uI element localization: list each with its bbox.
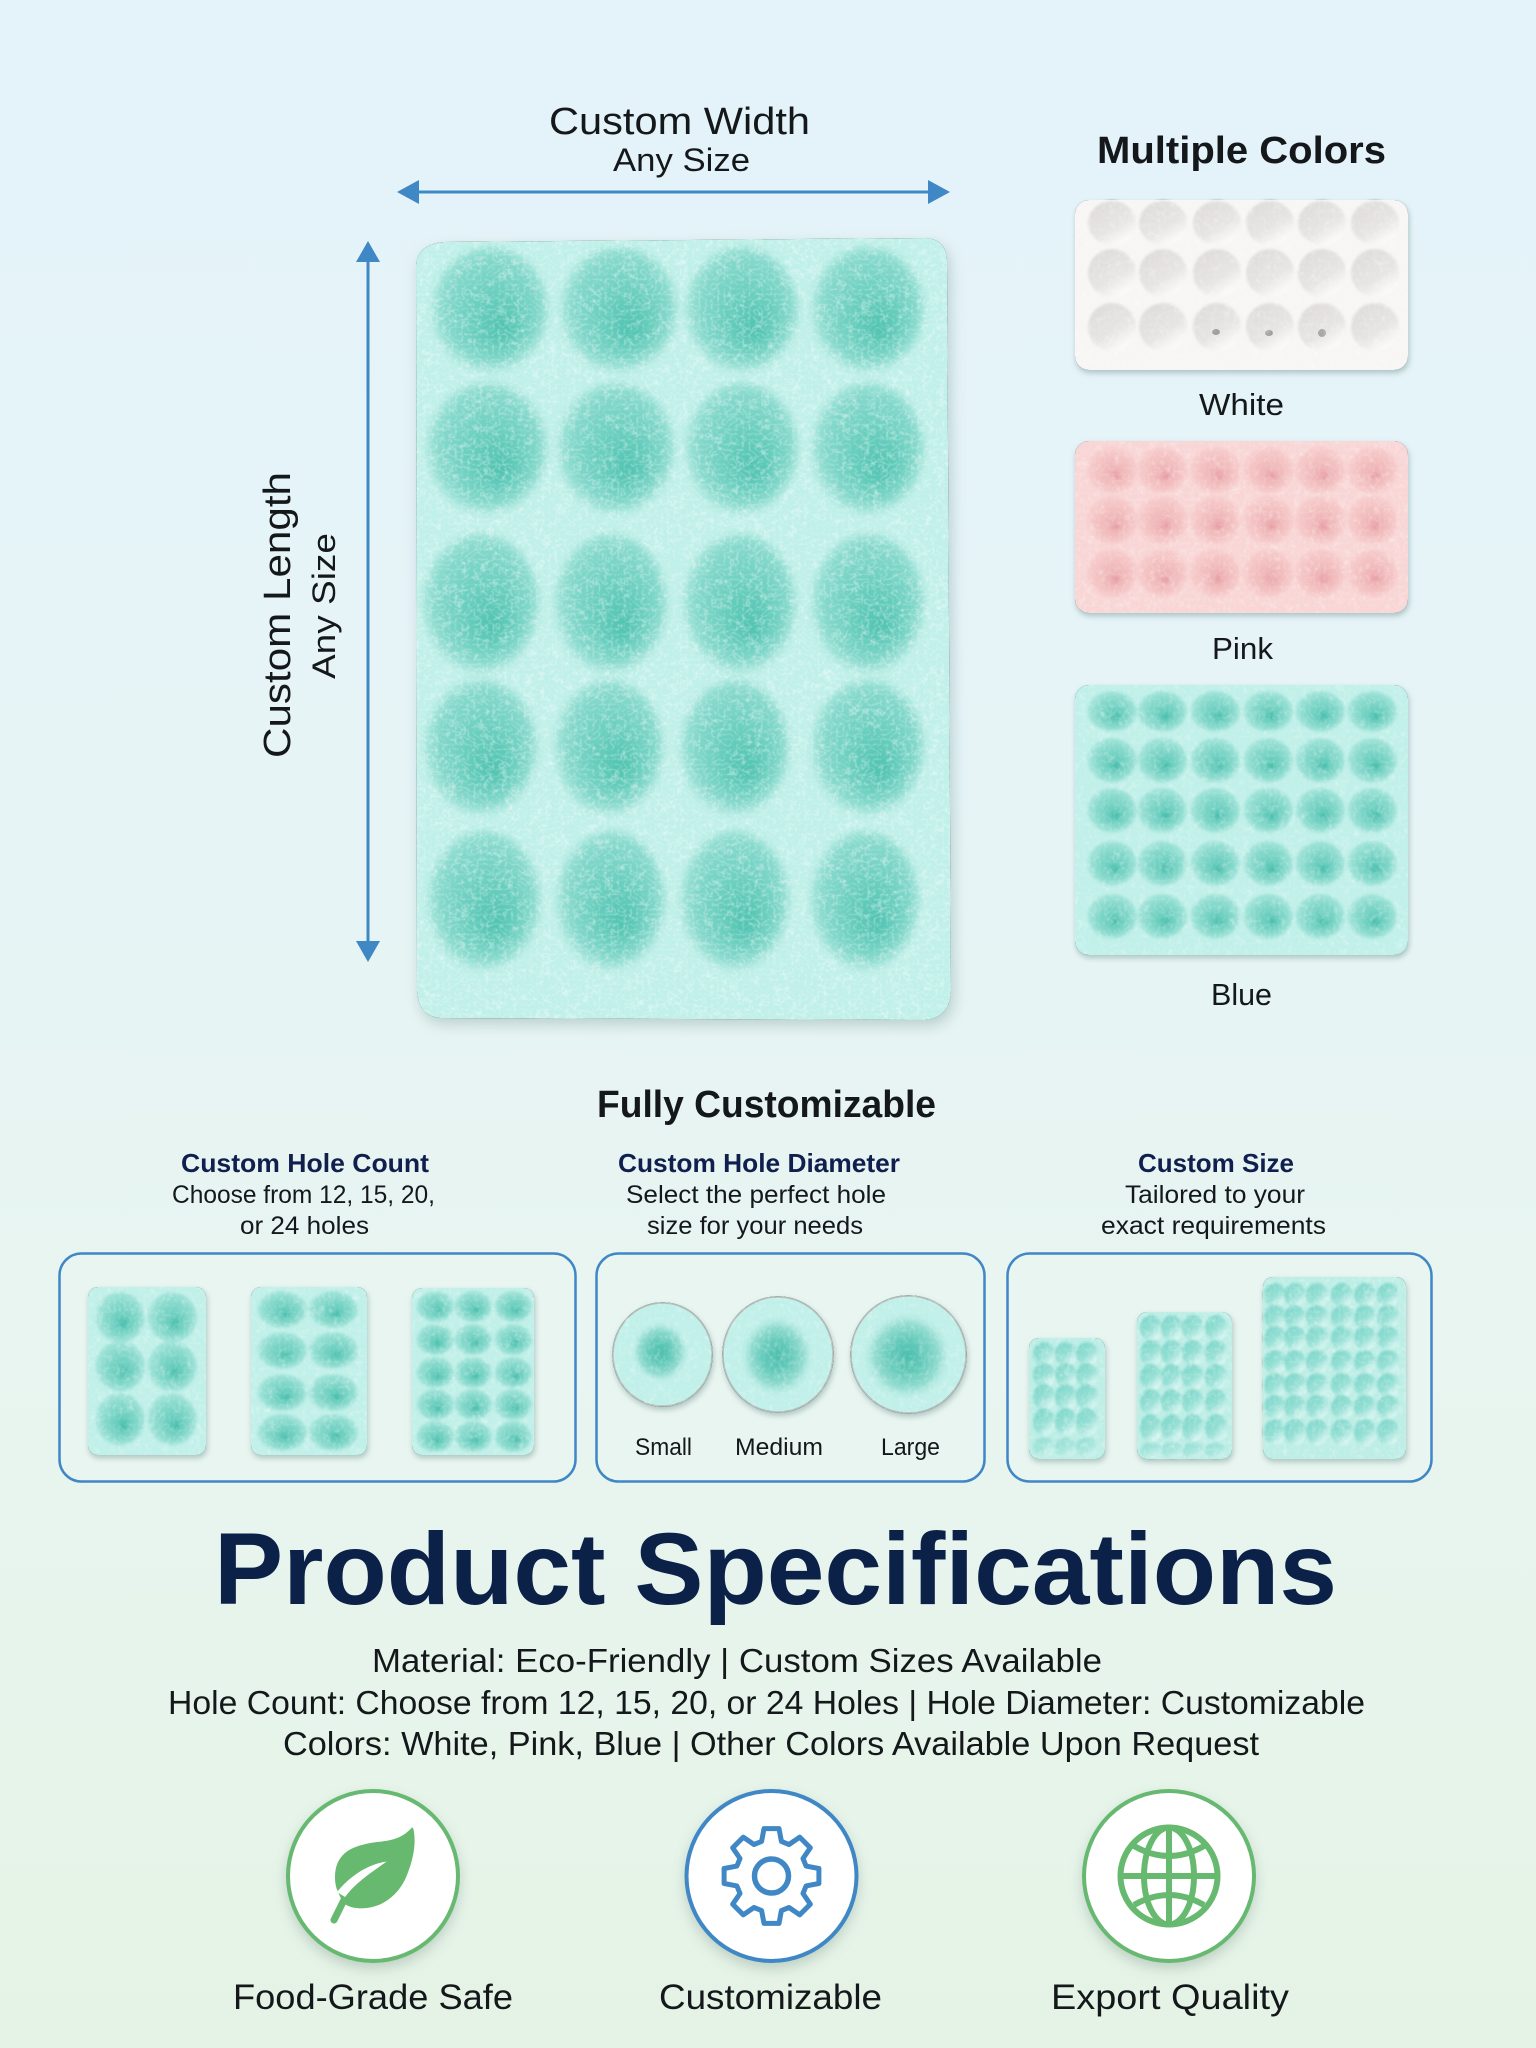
text block: custom hole diameter: Select the perfect hole [626, 1181, 886, 1209]
title: product specifications: Product Specifications [214, 1512, 1337, 1626]
text block: specification lines: Colors: White, Pink, Blue | Other Colors Available Upon Request [283, 1725, 1259, 1762]
hole sample: small [613, 1303, 712, 1406]
hole sample: medium [723, 1297, 833, 1412]
text block: specification lines [168, 1642, 1365, 1762]
label: export quality: Export Quality [1051, 1978, 1290, 2017]
text block: custom size: Tailored to your [1125, 1181, 1305, 1209]
panel: custom hole count [60, 1254, 576, 1482]
dimension label: custom length [257, 472, 342, 758]
hole sample: large [851, 1296, 966, 1413]
arrow: length [356, 241, 380, 962]
swatch: white tray [1075, 200, 1408, 370]
label: medium: Medium [735, 1434, 823, 1461]
text block: custom hole diameter: Custom Hole Diameter [618, 1148, 900, 1178]
text block: custom size: Custom Size [1138, 1148, 1294, 1178]
text block: specification lines: Material: Eco-Friendly | Custom Sizes Available [372, 1642, 1102, 1679]
text block: custom hole count [172, 1148, 435, 1240]
panel: custom hole diameter [596, 1254, 984, 1482]
dimension label: custom length: Custom Length [257, 472, 299, 758]
icon: food-grade leaf [288, 1791, 458, 1961]
label: pink: Pink [1212, 631, 1273, 666]
arrow: width [397, 180, 950, 204]
label: blue: Blue [1211, 977, 1272, 1012]
text block: custom hole count: Custom Hole Count [181, 1148, 429, 1178]
text block: custom hole diameter: size for your needs [647, 1212, 863, 1240]
text block: custom size [1101, 1148, 1326, 1240]
heading: fully customizable: Fully Customizable [597, 1084, 936, 1126]
tray: 24 holes [412, 1288, 534, 1455]
dimension label: custom width [549, 101, 810, 178]
tray: 15 holes [251, 1287, 367, 1455]
text block: custom hole count: or 24 holes [240, 1212, 369, 1240]
label: customizable: Customizable [659, 1978, 882, 2017]
text block: specification lines: Hole Count: Choose from 12, 15, 20, or 24 Holes | Hole Diameter: Customizable [168, 1684, 1365, 1721]
main product tray: 20 holes [416, 238, 951, 1020]
label: food-grade safe: Food-Grade Safe [233, 1978, 513, 2017]
label: large: Large [881, 1434, 940, 1461]
panel: custom size [1008, 1254, 1432, 1482]
icon: customizable gear [686, 1791, 856, 1961]
tray: small size [1029, 1338, 1105, 1459]
icon: export quality globe [1084, 1791, 1254, 1961]
label: white: White [1199, 387, 1284, 422]
text block: custom size: exact requirements [1101, 1212, 1326, 1240]
heading: multiple colors: Multiple Colors [1097, 130, 1386, 172]
dimension label: custom width: Any Size [613, 142, 750, 178]
tray: large size [1263, 1277, 1406, 1459]
swatch: blue tray [1075, 685, 1408, 955]
tray: medium size [1137, 1312, 1232, 1459]
tray: 12 holes [88, 1287, 206, 1455]
dimension label: custom width: Custom Width [549, 101, 810, 143]
label: small: Small [635, 1434, 692, 1461]
swatch: pink tray [1075, 441, 1408, 613]
text block: custom hole diameter [618, 1148, 900, 1240]
text block: custom hole count: Choose from 12, 15, 20, [172, 1181, 435, 1209]
dimension label: custom length: Any Size [306, 533, 342, 679]
